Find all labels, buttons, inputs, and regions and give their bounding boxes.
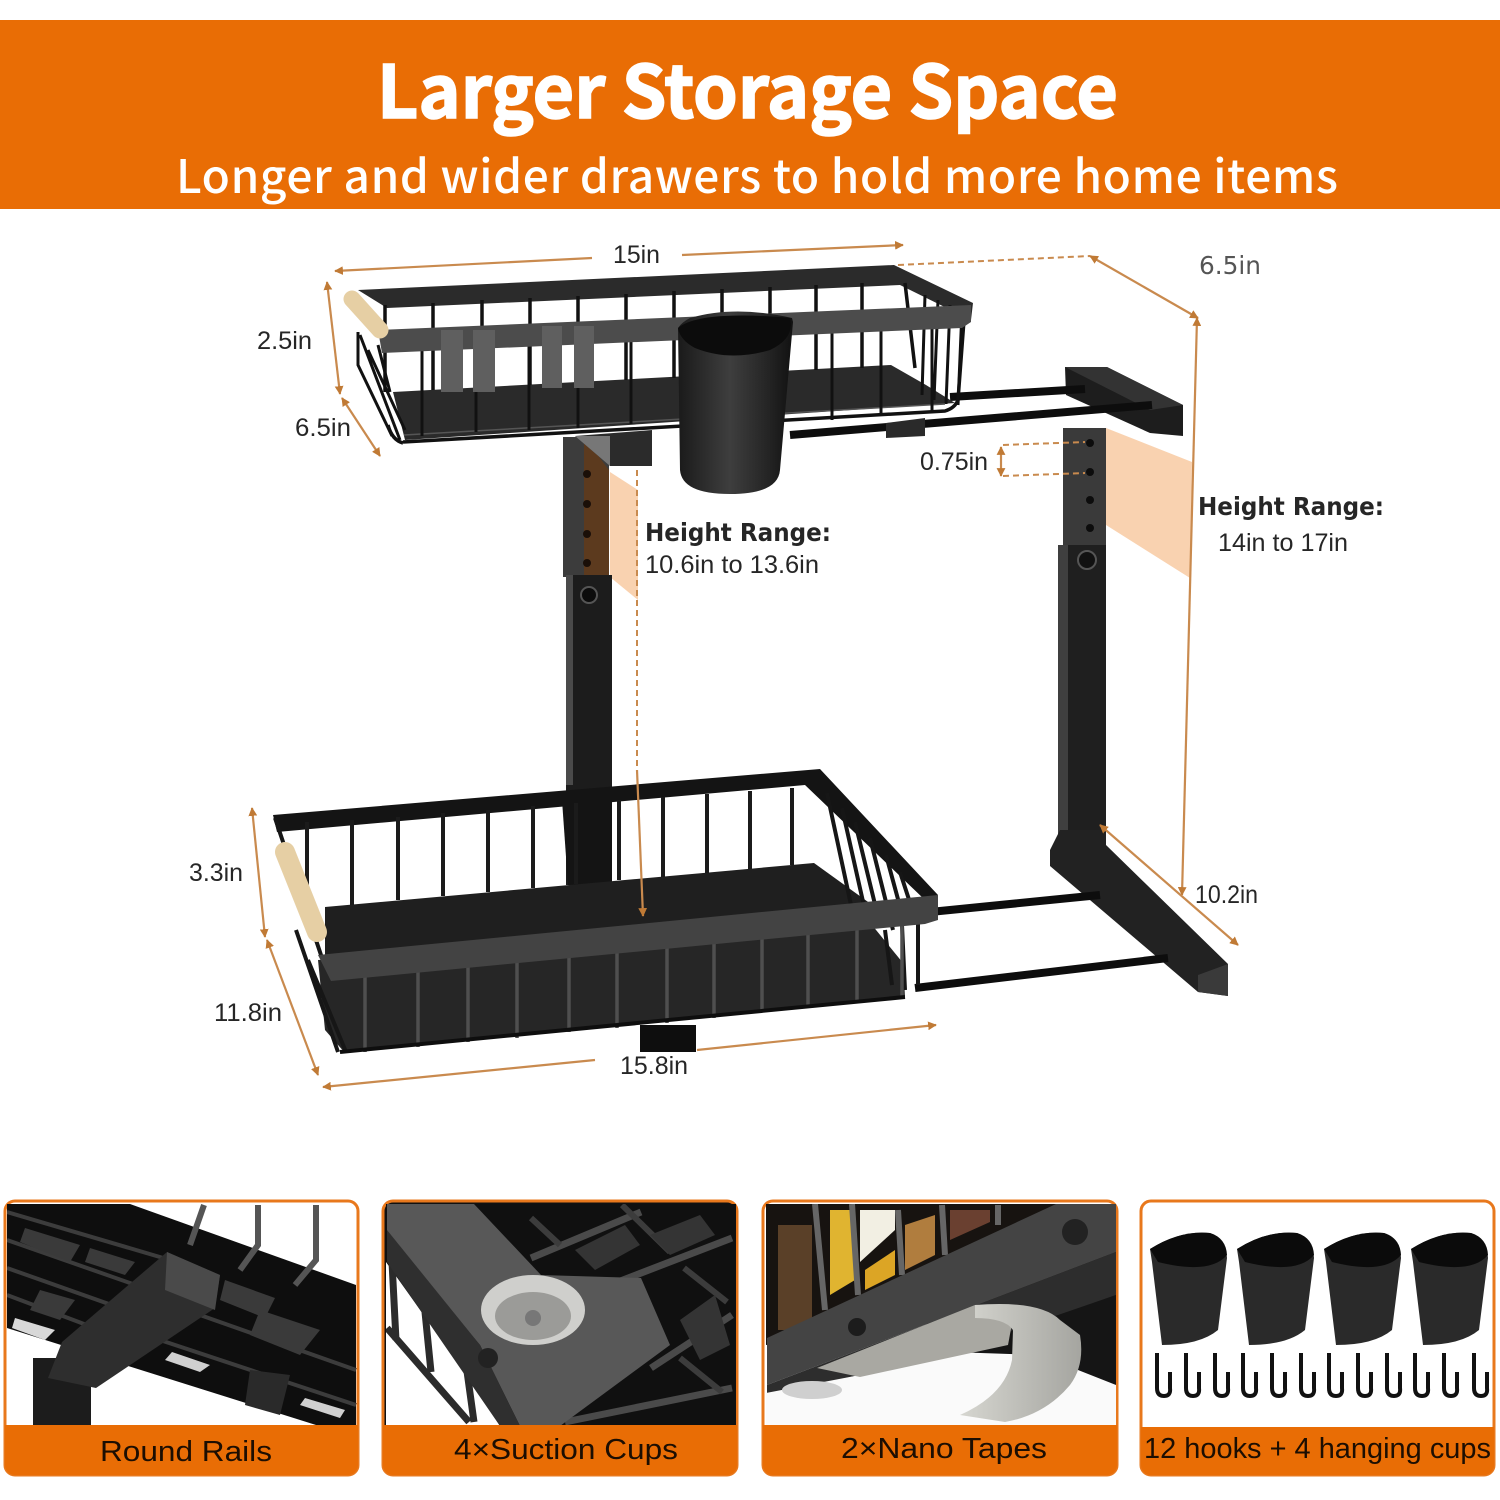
left side wires: [358, 332, 405, 440]
dimension labels: [189, 241, 1384, 1080]
title: Larger Storage Space: [377, 34, 1118, 140]
photo: suction cup close-up: [386, 1204, 736, 1426]
front wires: [365, 925, 902, 1052]
icons: twelve hooks: [1157, 1353, 1487, 1396]
panel: suction cups: [383, 1201, 737, 1475]
wooden handle: [352, 299, 380, 330]
floor: [393, 365, 955, 440]
panel: nano tapes: [763, 1201, 1117, 1475]
dimension labels: 2.5in: [257, 327, 312, 355]
front band: [318, 895, 938, 981]
upper rails: [790, 389, 1152, 435]
base foot: [1050, 830, 1228, 996]
product: rack frame: [563, 367, 1228, 1052]
front wires: [422, 315, 932, 436]
upper basket: [352, 265, 973, 443]
dimension labels: 6.5in: [1199, 251, 1261, 280]
photo: rails close-up: [7, 1204, 356, 1426]
top bracket: [1065, 367, 1183, 436]
back rim: [358, 265, 973, 320]
left upright post: [563, 430, 652, 885]
dimension labels: 15in: [613, 241, 660, 269]
right side wires: [922, 295, 962, 405]
right side wires: [827, 793, 918, 990]
back rim: [273, 769, 938, 900]
dimension labels: 10.6in to 13.6in: [645, 551, 819, 579]
back wires: [385, 283, 915, 392]
lower rails: [915, 895, 1168, 988]
caption: 12 hooks + 4 hanging cups: [1144, 1433, 1491, 1465]
right upright post: [1058, 428, 1106, 850]
icons: four hanging cups: [1150, 1233, 1488, 1345]
dimension labels: 3.3in: [189, 859, 243, 887]
dimension labels: 6.5in: [295, 414, 351, 442]
panel: round rails: [5, 1201, 358, 1475]
dimension labels: Height Range:: [645, 518, 831, 547]
dimension labels: 11.8in: [214, 999, 282, 1027]
photo: tape close-up: [766, 1204, 1116, 1426]
floor front: [318, 925, 905, 1053]
back wires: [307, 788, 792, 909]
subtitle: Longer and wider drawers to hold more home items: [176, 141, 1338, 207]
dimension arrows: [252, 245, 1238, 1087]
lower basket: [273, 769, 938, 1053]
caption: Round Rails: [100, 1436, 272, 1468]
wooden handle: [285, 852, 317, 932]
floor upper: [325, 863, 900, 962]
dimension labels: 15.8in: [620, 1052, 688, 1080]
dimension labels: Height Range:: [1198, 492, 1384, 521]
dimension labels: 10.2in: [1195, 881, 1258, 909]
left side frame: [275, 818, 346, 1052]
bottom wire rail: [388, 320, 964, 443]
caption: 2×Nano Tapes: [841, 1433, 1047, 1465]
hanging cup: [678, 312, 793, 494]
dimension labels: 0.75in: [920, 448, 988, 476]
header banner: [0, 20, 1500, 209]
front band: [378, 305, 971, 353]
caption: 4×Suction Cups: [454, 1434, 678, 1466]
back wires and post over white: [562, 800, 612, 885]
dimension labels: 14in to 17in: [1218, 529, 1348, 557]
panel: hooks and cups: [1141, 1201, 1494, 1475]
hook clips: [441, 326, 594, 392]
orange height range highlights: [610, 428, 1192, 600]
